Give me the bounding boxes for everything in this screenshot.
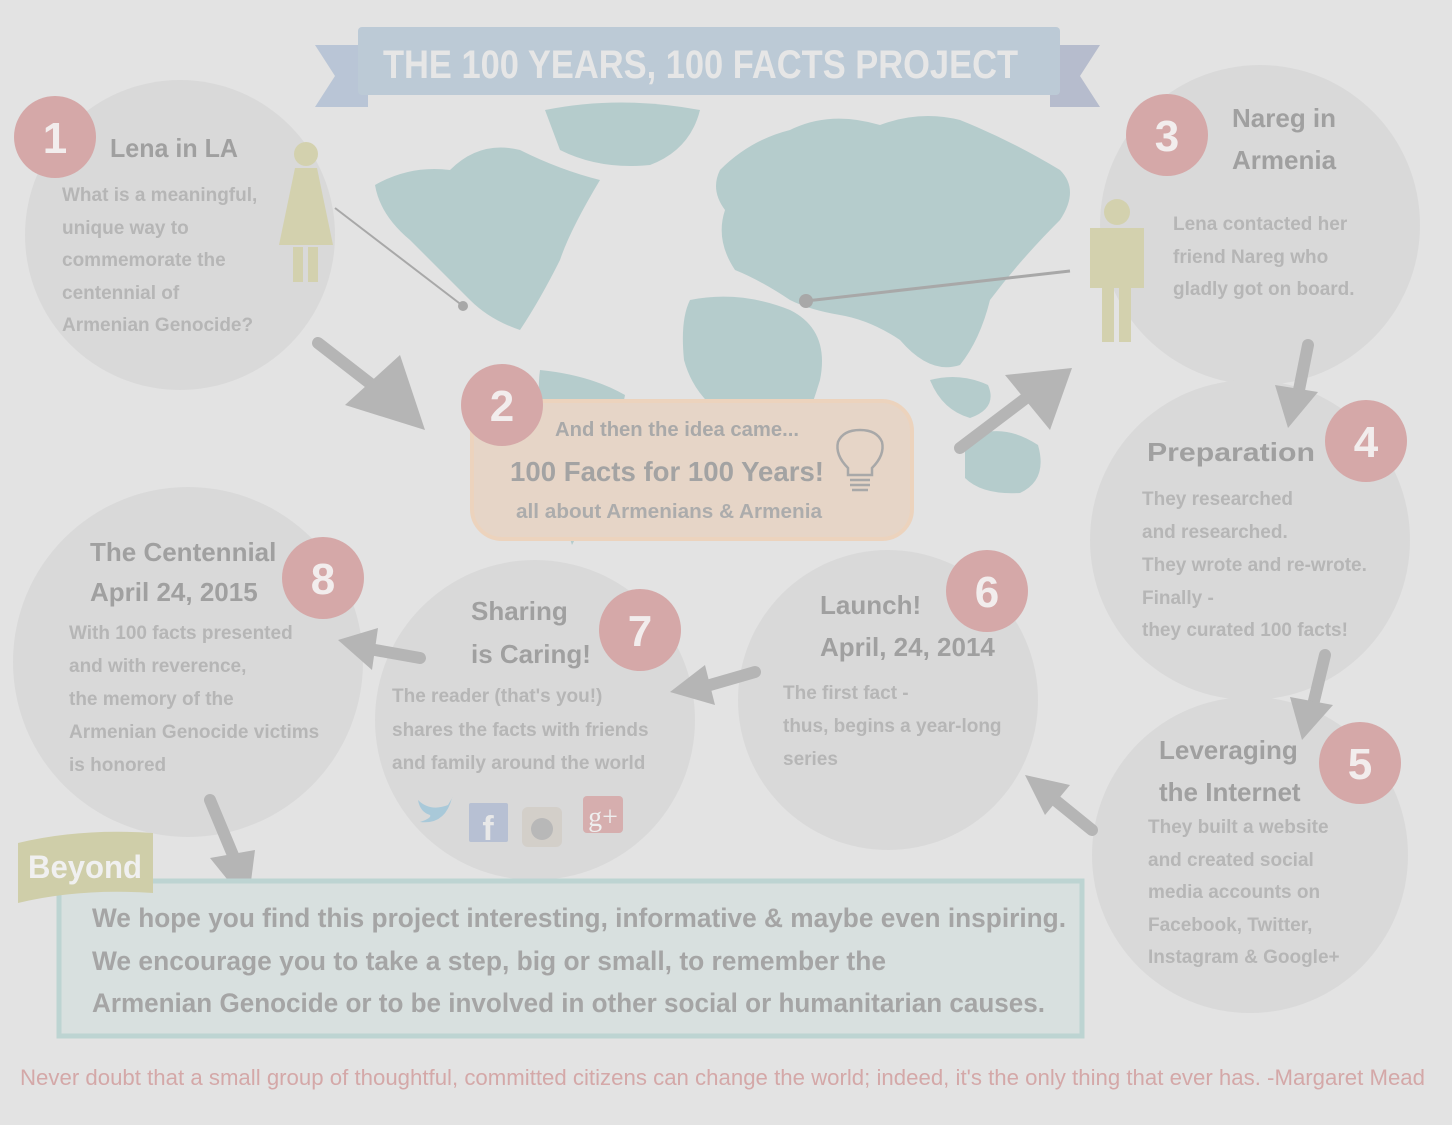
panel 4 text: they curated 100 facts! (1142, 620, 1348, 641)
beyond flag: Beyond (28, 849, 142, 885)
number badges: 5 (1348, 740, 1372, 789)
panel 6 text: The first fact - (783, 683, 909, 704)
panel 5 text: Facebook, Twitter, (1148, 915, 1312, 936)
panel 7 text: shares the facts with friends (392, 720, 649, 741)
panel 4 text: They researched (1142, 489, 1293, 510)
panel 1 text: Lena in LA (110, 133, 238, 163)
panel 3 text: Lena contacted her (1173, 214, 1348, 235)
panel 6 text: series (783, 749, 838, 770)
panel 1 text: Armenian Genocide? (62, 315, 253, 336)
number badges: 8 (311, 555, 335, 604)
panel 1 text: centennial of (62, 283, 180, 304)
number badges: 4 (1354, 418, 1379, 467)
panel 7 text: is Caring! (471, 639, 591, 669)
panel 5 text: media accounts on (1148, 882, 1320, 903)
beyond box: We hope you find this project interesting, informative & maybe even inspiring. (92, 903, 1066, 933)
panel 3 text: Armenia (1232, 145, 1337, 175)
panel 7 text: and family around the world (392, 753, 645, 774)
panel 2: idea box: 100 Facts for 100 Years! (510, 456, 824, 487)
social icons: g+ (588, 802, 618, 833)
world map (375, 102, 1070, 545)
quote: Never doubt that a small group of thoughtful, committed citizens can change the world; indeed, it's the only thing that ever has. -Margaret Mead (20, 1065, 1425, 1090)
icon: light bulb (837, 430, 883, 490)
panel 4 text: Finally - (1142, 588, 1214, 609)
panel 3 text: gladly got on board. (1173, 279, 1355, 300)
number badges: 6 (975, 568, 999, 617)
panel 5 text: the Internet (1159, 777, 1301, 807)
panel 5 text: and created social (1148, 850, 1314, 871)
arrows (210, 343, 1333, 905)
panel 8 text: and with reverence, (69, 656, 246, 677)
panel 1 text: What is a meaningful, (62, 185, 257, 206)
panel 4 text: Preparation (1147, 437, 1315, 467)
icon: man (799, 199, 1144, 342)
panel 5 text: Leveraging (1159, 735, 1298, 765)
number badges: 1 (43, 114, 67, 163)
title banner: THE 100 YEARS, 100 FACTS PROJECT (383, 43, 1018, 87)
panel 4 text: and researched. (1142, 522, 1288, 543)
panel 3 text: Nareg in (1232, 103, 1336, 133)
panel 3 text (1173, 103, 1355, 300)
panel 6 text: April, 24, 2014 (820, 632, 995, 662)
panel 8 text: April 24, 2015 (90, 577, 258, 607)
panel 8 text (69, 537, 319, 776)
beyond box (59, 881, 1082, 1036)
panel 3 text: friend Nareg who (1173, 247, 1328, 268)
panel 8 text: Armenian Genocide victims (69, 722, 319, 743)
number badges: 3 (1155, 112, 1179, 161)
panel 2: idea box: all about Armenians & Armenia (516, 501, 823, 523)
panel 1 text: commemorate the (62, 250, 226, 271)
panel 5 text: They built a website (1148, 817, 1329, 838)
panel 8 text: The Centennial (90, 537, 276, 567)
panel 7 text: The reader (that's you!) (392, 686, 602, 707)
title banner (315, 27, 1100, 107)
social icons (418, 796, 623, 848)
panel 2: idea box (472, 401, 912, 539)
panel 6 text (783, 590, 1002, 770)
beyond box: We encourage you to take a step, big or small, to remember the (92, 946, 886, 976)
panel 4 text: They wrote and re-wrote. (1142, 555, 1367, 576)
social icons: f (482, 810, 494, 848)
panel 5 text (1148, 735, 1340, 968)
panel 7 text (392, 596, 649, 774)
panel 6 text: Launch! (820, 590, 921, 620)
beyond flag (18, 832, 153, 903)
icon: woman (279, 142, 468, 311)
panel 1 text: unique way to (62, 218, 189, 239)
panel 8 text: With 100 facts presented (69, 623, 293, 644)
number badges: 7 (628, 607, 652, 656)
panel 5 text: Instagram & Google+ (1148, 947, 1340, 968)
panel 2: idea box: And then the idea came... (555, 419, 799, 441)
number badges (14, 94, 1407, 804)
panel 7 text: Sharing (471, 596, 568, 626)
panel 1 text (62, 133, 257, 336)
number badges: 2 (490, 382, 514, 431)
panel 4 text (1142, 437, 1367, 641)
panel 8 text: is honored (69, 755, 166, 776)
beyond box: Armenian Genocide or to be involved in other social or humanitarian causes. (92, 988, 1045, 1018)
panel 6 text: thus, begins a year-long (783, 716, 1002, 737)
panel 8 text: the memory of the (69, 689, 234, 710)
